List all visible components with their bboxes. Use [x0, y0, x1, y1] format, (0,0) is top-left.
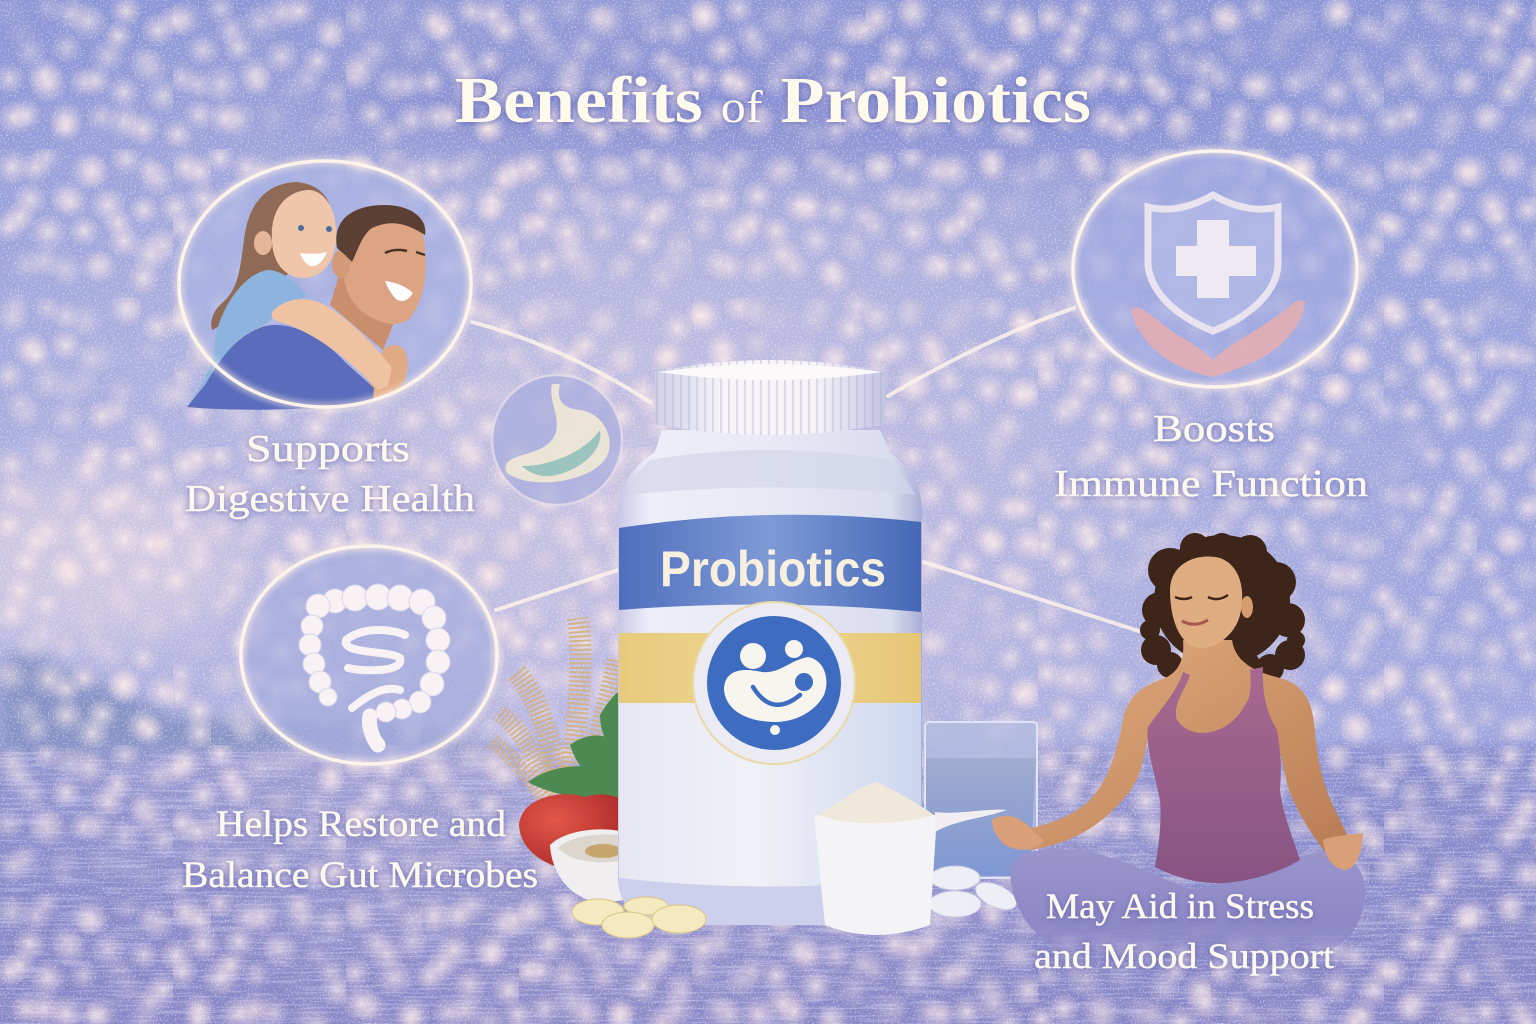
- apple: [519, 794, 622, 868]
- man neck: [330, 255, 395, 350]
- bowl: [550, 829, 625, 903]
- label: stress and mood: [1034, 886, 1334, 976]
- label: stress and mood: and Mood Support: [1034, 936, 1334, 976]
- label: restore and balance: Balance Gut Microbes: [182, 855, 538, 896]
- blue label band: [619, 515, 921, 612]
- man's head: [332, 205, 426, 324]
- title: Benefits of Probiotics: [455, 64, 1091, 137]
- ring: [241, 546, 497, 764]
- panel: stomach circle: [492, 375, 622, 505]
- ring: [179, 161, 471, 407]
- man's shoulder and arm: [365, 345, 407, 400]
- shoulder highlight: [625, 450, 915, 495]
- girl's face: [254, 190, 336, 278]
- connector lines: [472, 308, 1142, 632]
- girl's shirt: [187, 270, 306, 407]
- ring: [1073, 151, 1357, 387]
- leaves: [528, 690, 622, 800]
- woman meditating: [992, 533, 1365, 958]
- label: stress and mood: May Aid in Stress: [1046, 886, 1314, 926]
- label: boosts immune function: Boosts: [1153, 408, 1275, 450]
- label: restore and balance: [182, 804, 538, 896]
- gold band: [619, 633, 921, 703]
- label: supports digestive health: Digestive Health: [185, 478, 475, 520]
- hands: [992, 816, 1044, 850]
- fronds: [491, 618, 618, 800]
- panel: family photo circle: [179, 161, 471, 410]
- icon: open hands: [1131, 300, 1305, 377]
- bottle: [618, 360, 922, 925]
- supplement capsules: [572, 866, 1021, 938]
- label: restore and balance: Helps Restore and: [216, 804, 507, 845]
- legs: [1010, 849, 1365, 958]
- label: supports digestive health: [185, 428, 475, 520]
- cap: [655, 360, 885, 435]
- icon: stomach: [505, 384, 610, 482]
- arms and shoulders: [1020, 640, 1352, 852]
- icon: intestines: [299, 584, 450, 722]
- logo: [693, 602, 855, 764]
- man's shirt: [187, 325, 374, 410]
- curly hair: [1140, 533, 1305, 682]
- label: boosts immune function: Immune Function: [1054, 463, 1368, 505]
- powder scoop: [814, 782, 1007, 935]
- girl hair: [211, 182, 332, 330]
- face: [1170, 557, 1253, 648]
- panel: shield circle: [1073, 151, 1357, 387]
- glass of water: [925, 722, 1037, 878]
- label: supports digestive health: Supports: [246, 428, 410, 470]
- plant and apple: [491, 618, 625, 903]
- icon: shield with cross: [1148, 195, 1278, 331]
- bottle body: [618, 430, 922, 925]
- label: boosts immune function: [1054, 408, 1368, 505]
- label text: Probiotics: [660, 541, 886, 597]
- panel: intestine circle: [241, 546, 497, 764]
- girl's arm: [272, 299, 392, 390]
- tank top: [1147, 667, 1300, 883]
